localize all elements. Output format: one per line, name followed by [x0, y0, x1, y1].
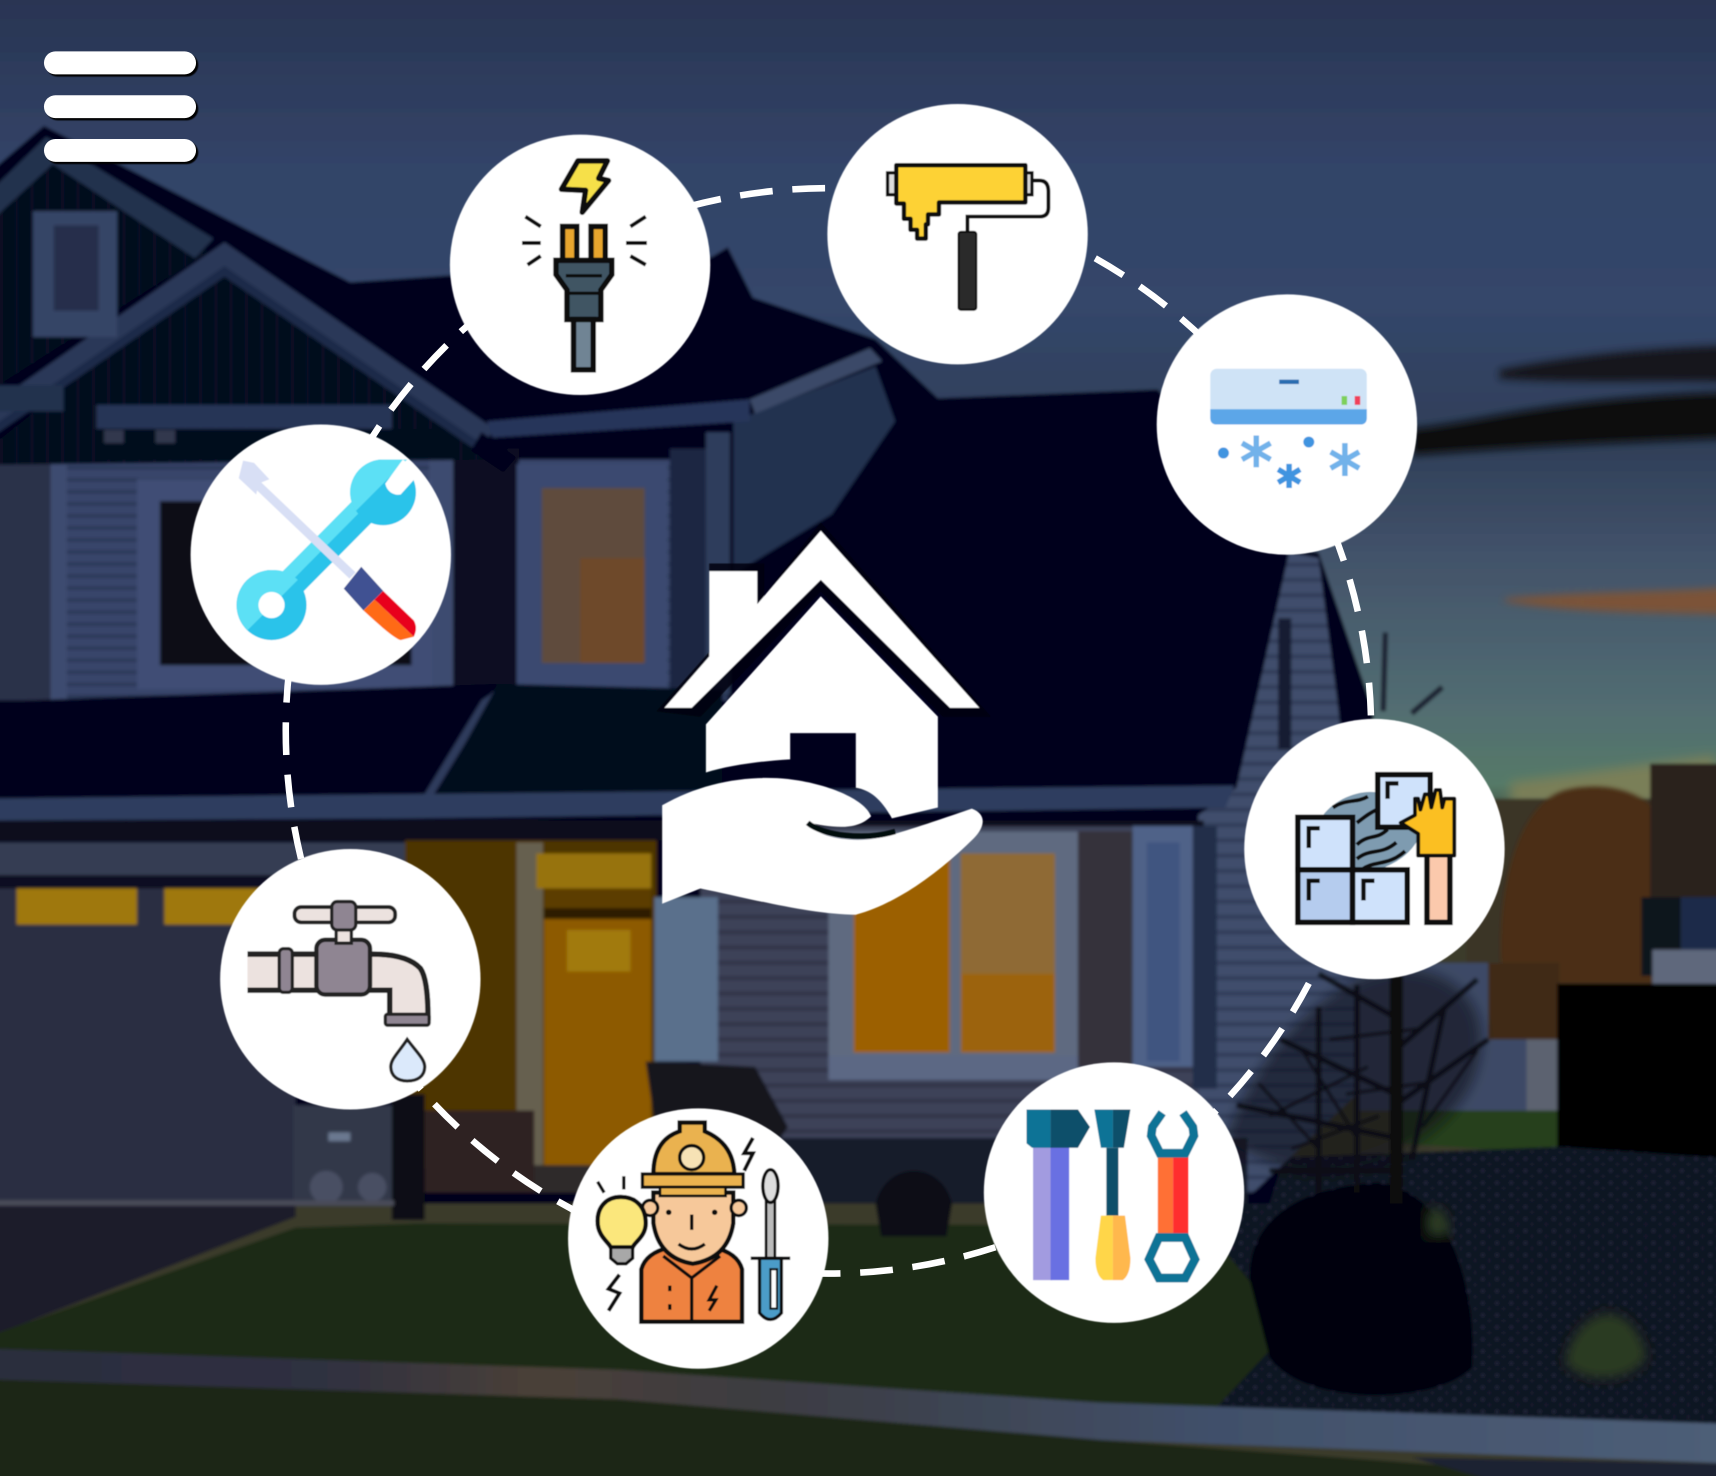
upper windows [137, 479, 432, 689]
icon: wrench [1149, 1113, 1195, 1278]
top gable [0, 144, 208, 405]
icon: screwdriver [1094, 1109, 1130, 1280]
main wall [700, 826, 1198, 1193]
icon: face [653, 1193, 733, 1264]
service: electrical plug [450, 135, 710, 395]
right column [1133, 826, 1193, 1067]
icon: lightning bolt [561, 161, 609, 212]
icon: bulb [598, 1197, 646, 1247]
service: wrench and screwdriver [191, 425, 451, 685]
menu icon [44, 51, 198, 164]
sky clouds [1412, 392, 1716, 455]
shrubs and tree [876, 1171, 952, 1236]
icon: screwdriver [766, 1198, 775, 1258]
dashed ring connecting the service circles [286, 188, 1371, 1274]
icon: plug [522, 217, 647, 370]
service: paint roller [827, 104, 1088, 364]
service: tiling [1244, 719, 1505, 979]
right siding wall [1198, 553, 1357, 1193]
icon: house in a hand [657, 523, 990, 915]
icon: small bolts [609, 1138, 753, 1311]
upper left wall [0, 460, 728, 700]
house silhouette and roofs [0, 126, 1373, 1204]
icon: screwdriver [239, 461, 416, 640]
ground [0, 1204, 296, 1346]
service: hand tools [984, 1062, 1244, 1323]
icon: helmet [653, 1123, 734, 1174]
blue siding bay [733, 367, 895, 574]
icon: wrench [237, 460, 420, 640]
garage [0, 875, 296, 1204]
icon: shirt [641, 1247, 742, 1322]
right window [828, 832, 1078, 1078]
service: water tap [220, 849, 481, 1109]
distant trees and buildings [1466, 799, 1716, 990]
left gable [0, 263, 514, 465]
service: electrician worker [568, 1108, 828, 1369]
icon: hammer [1026, 1109, 1090, 1280]
lower roofs [0, 684, 498, 799]
icon: snowflakes [1242, 435, 1359, 488]
porch and door [405, 840, 657, 1169]
service: air conditioner [1157, 294, 1417, 555]
eave trim [0, 786, 1234, 821]
